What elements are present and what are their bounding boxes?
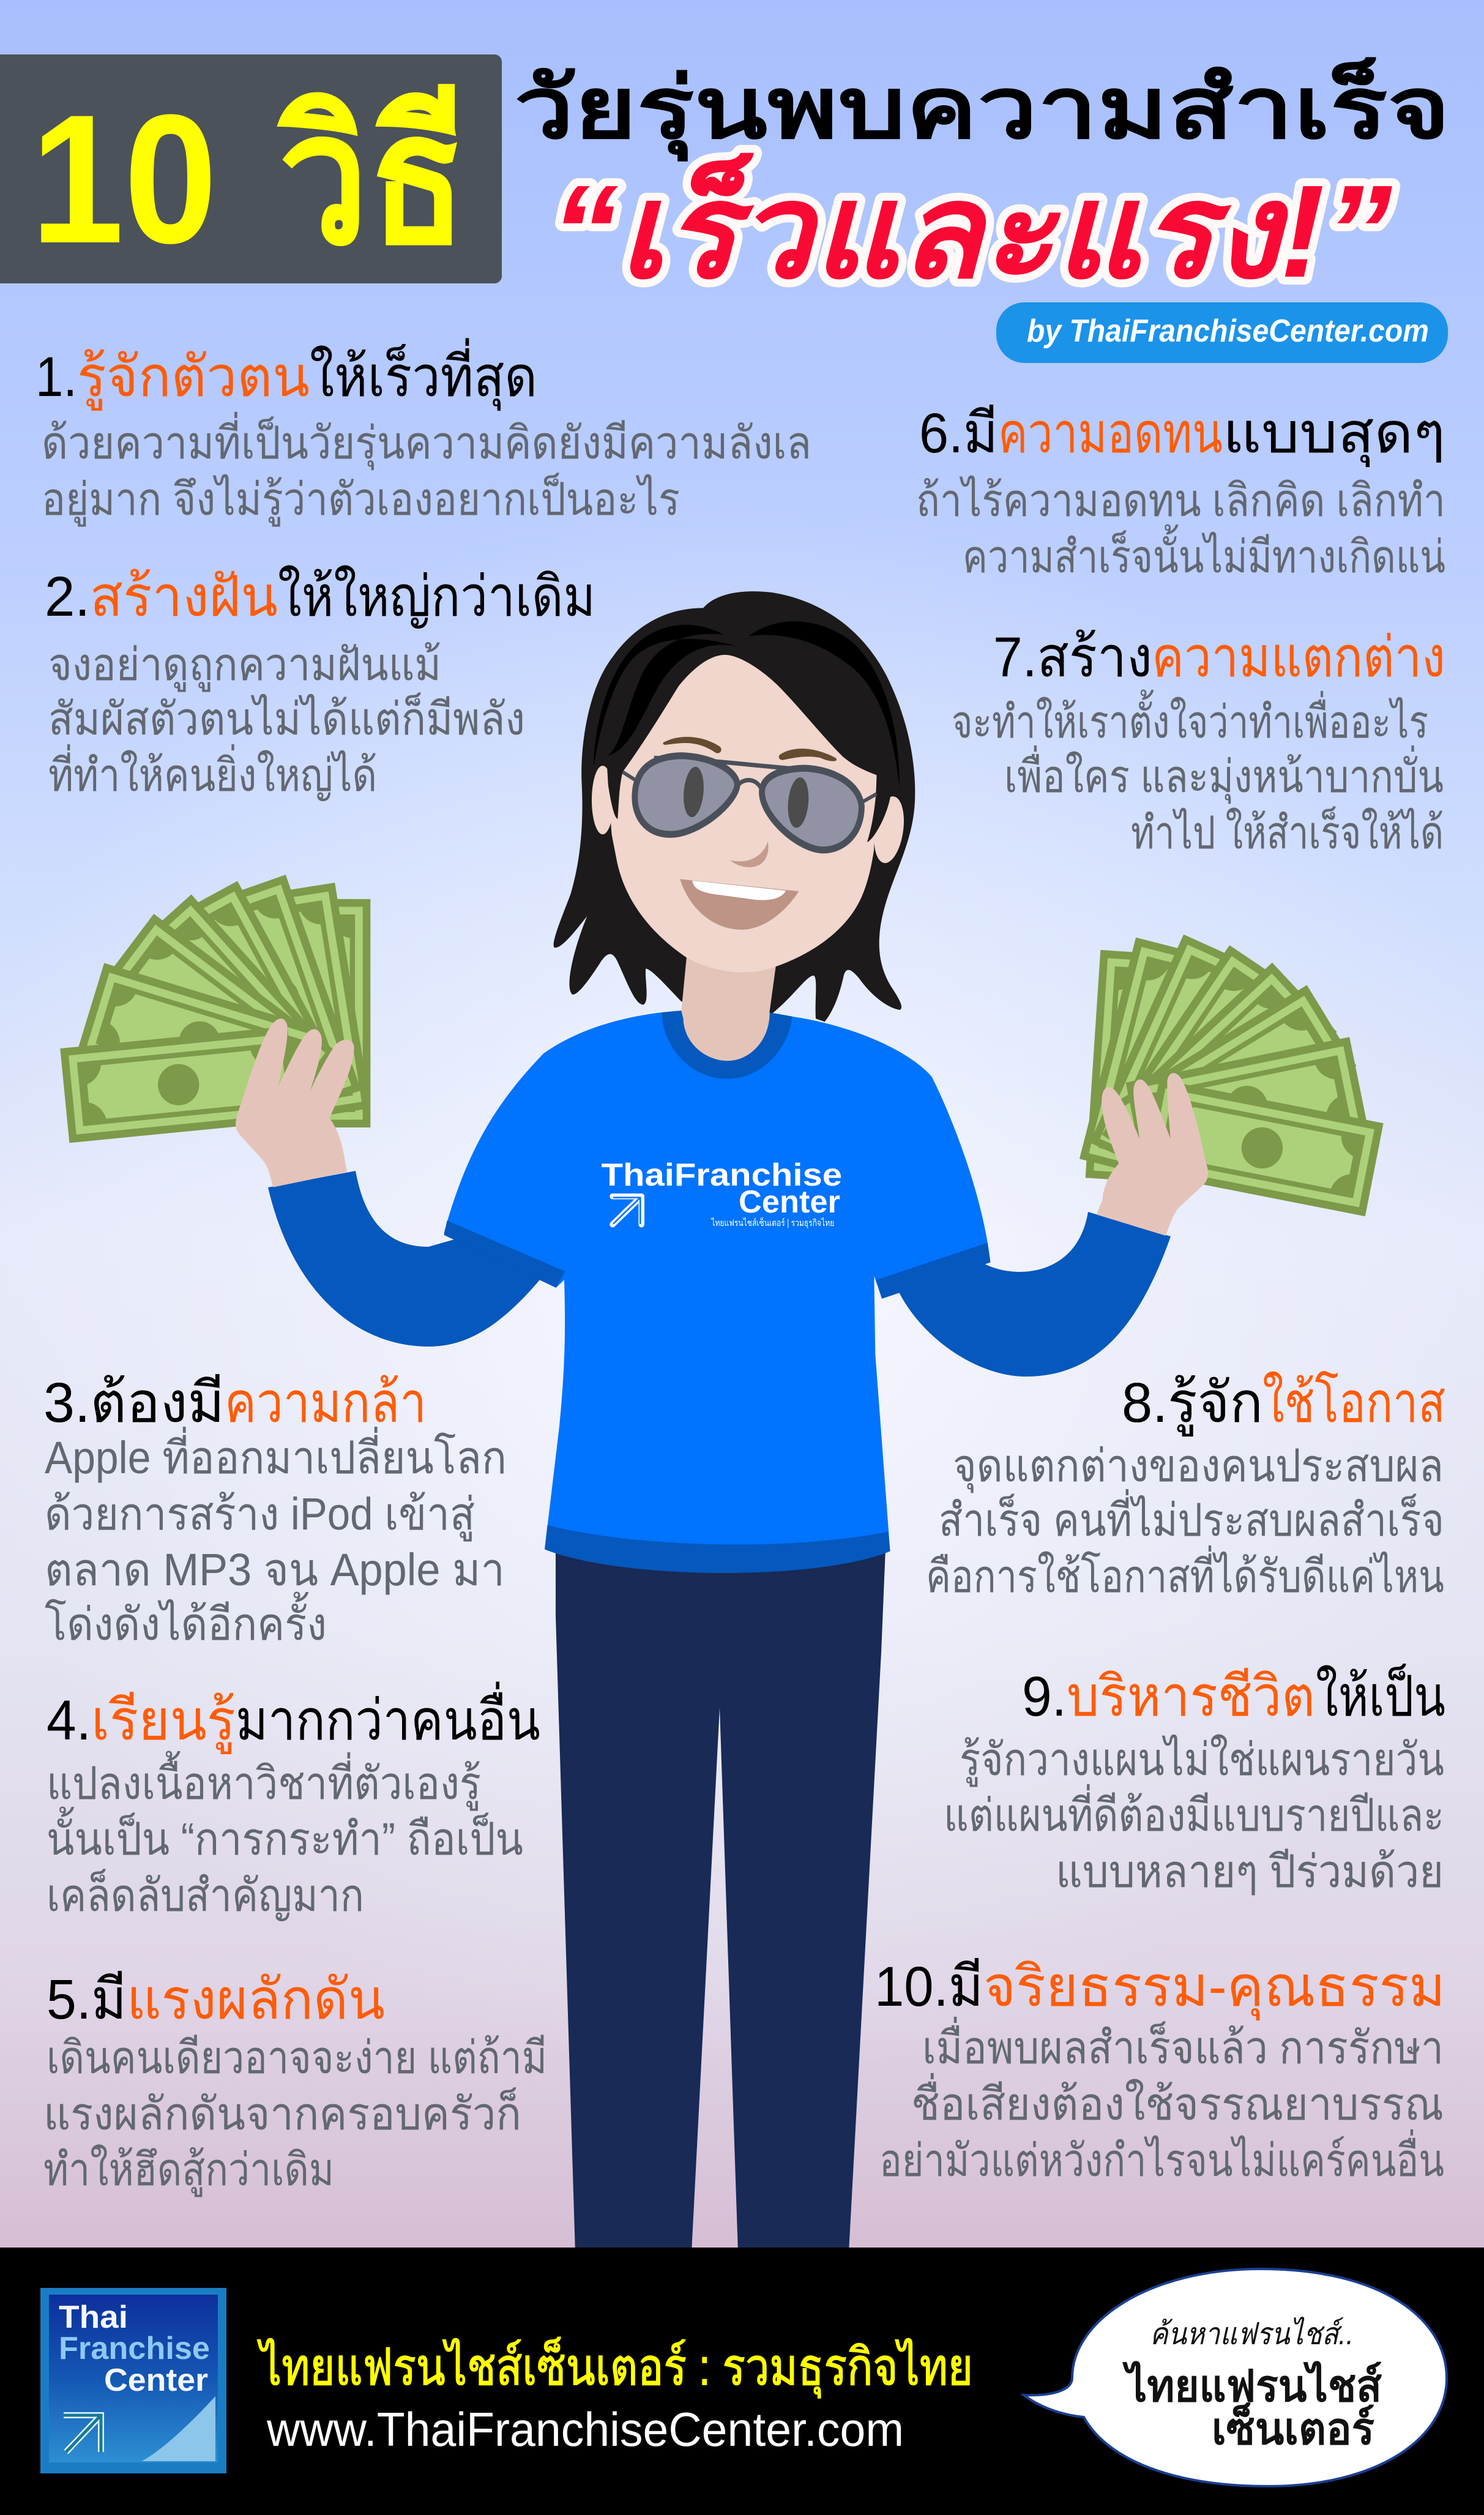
panel: title badge 10 วิธี (0, 54, 502, 283)
head (592, 655, 908, 1061)
heading: เร็วและแรง: “เร็วและแรง!” (551, 152, 1392, 305)
heading: วัยรุ่นพบความสำเร็จ: วัยรุ่นพบความสำเร็จ (514, 56, 1450, 162)
tip 9 body: แบบหลายๆ ปีร่วมด้วย (1056, 1846, 1444, 1897)
tip 9 heading: บริหารชีวิต (1067, 1665, 1315, 1728)
hair (554, 591, 915, 1022)
tip 1 heading: รู้จักตัวตน (77, 346, 310, 411)
tip 9 heading: 9. (1022, 1665, 1067, 1728)
tip 1 heading: ให้เร็วที่สุด (310, 338, 537, 411)
tip 10 body: ชื่อเสียงต้องใช้จรรณยาบรรณ (911, 2072, 1444, 2129)
panel: title badge 10 วิธี: 10 (31, 76, 217, 282)
left sleeve arm (268, 1171, 551, 1347)
panel: title badge 10 วิธี: วิธี (276, 76, 467, 282)
illustration: money fan right (1072, 926, 1391, 1224)
tip 9 heading (1022, 1663, 1445, 1728)
shirt logo: ไทยแฟรนไชส์เซ็นเตอร์ | รวมธุรกิจไทย (710, 1217, 834, 1229)
tip 4 body: แปลงเนื้อหาวิชาที่ตัวเองรู้ (47, 1751, 481, 1811)
tip 10 body (879, 2016, 1444, 2186)
tip 8 heading (1122, 1371, 1445, 1437)
sideburns (607, 766, 625, 819)
tip 2 body: สัมผัสตัวตนไม่ได้แต่ก็มีพลัง (48, 693, 525, 744)
right sleeve arm (881, 1212, 1171, 1377)
tip 4 body: นั้นเป็น “การกระทำ” ถือเป็น (47, 1806, 523, 1864)
byline pill (996, 302, 1448, 363)
tip 1 body: ด้วยความที่เป็นวัยรุ่นความคิดยังมีความลังเล (42, 411, 811, 471)
tip 8 (926, 1371, 1445, 1602)
illustration: money fan left (53, 866, 378, 1150)
tip 2 body (48, 639, 525, 801)
tip 8 body (926, 1440, 1444, 1602)
tip 7 heading: 7.สร้าง (993, 626, 1152, 689)
tip 3 body: ด้วยการสร้าง iPod เข้าสู่ (45, 1489, 475, 1542)
tip 2 body: ที่ทำให้คนยิ่งใหญ่ได้ (48, 744, 377, 801)
speech bubble (1024, 2269, 1447, 2486)
tip 2 heading (45, 566, 595, 629)
nose (730, 841, 769, 867)
neck (681, 955, 776, 1061)
tip 4 heading: มากกว่าคนอื่น (236, 1681, 540, 1752)
illustration: character (236, 591, 1208, 2252)
footer logo: Franchise (59, 2331, 210, 2366)
tip 5 (43, 1968, 547, 2197)
tip 1 body: อยู่มาก จึงไม่รู้ว่าตัวเองอยากเป็นอะไร (42, 473, 680, 527)
footer logo (40, 2288, 226, 2473)
tip 6 heading: ความอดทน (998, 402, 1223, 465)
mouth (680, 879, 799, 930)
trousers (556, 1549, 886, 2252)
tip 9 (944, 1663, 1445, 1897)
tip 4 heading: 4. (47, 1689, 91, 1752)
eyebrows (663, 737, 721, 753)
shirt logo (602, 1157, 842, 1229)
tip 3 heading: 3.ต้องมี (43, 1372, 225, 1434)
shirt logo: Center (739, 1184, 840, 1220)
tip 10 heading: จริยธรรม-คุณธรรม (983, 1956, 1445, 2021)
tip 5 body (43, 2032, 547, 2197)
tip 10 (874, 1956, 1445, 2186)
speech bubble: ไทยแฟรนไชส์ (1122, 2360, 1382, 2411)
tip 8 heading: 8.รู้จัก (1122, 1372, 1263, 1437)
right hand (1097, 1073, 1208, 1236)
tip 7 heading: ความแตกต่าง (1152, 626, 1445, 689)
speech bubble: ค้นหาแฟรนไชส์.. (1150, 2317, 1354, 2351)
tip 7 (952, 626, 1445, 858)
tip 4 (47, 1681, 540, 1921)
tip 4 heading: เรียนรู้ (91, 1689, 236, 1754)
footer website: www.ThaiFranchiseCenter.com (266, 2402, 904, 2456)
tip 3 body: Apple ที่ออกมาเปลี่ยนโลก (45, 1426, 507, 1483)
tip 1 heading: 1. (35, 346, 77, 408)
tip 3 heading (43, 1372, 427, 1434)
tip 2 heading: ให้ใหญ่กว่าเดิม (278, 566, 595, 629)
tip 1 (35, 338, 811, 527)
face (608, 655, 877, 973)
tip 9 heading: ให้เป็น (1316, 1663, 1445, 1728)
speech bubble: เซ็นเตอร์ (1212, 2402, 1374, 2454)
tip 5 body: แรงผลักดันจากครอบครัวก็ (43, 2088, 521, 2139)
byline pill: by ThaiFranchiseCenter.com (1027, 313, 1429, 349)
tip 4 body: เคล็ดลับสำคัญมาก (47, 1869, 364, 1921)
tip 5 body: เดินคนเดียวอาจจะง่าย แต่ถ้ามี (47, 2032, 547, 2083)
tip 7 heading (993, 626, 1445, 689)
tip 7 body (952, 689, 1444, 858)
tip 3 body: ตลาด MP3 จน Apple มา (45, 1544, 505, 1595)
left hand (236, 1018, 354, 1187)
tip 5 heading: 5.มี (47, 1968, 127, 2031)
tip 2 (45, 566, 595, 801)
footer tagline: ไทยแฟรนไชส์เซ็นเตอร์ : รวมธุรกิจไทย (257, 2337, 973, 2399)
tip 6 heading (919, 402, 1445, 468)
tip 6 (916, 402, 1445, 582)
tip 2 heading: สร้างฝัน (90, 566, 278, 628)
footer logo: Center (104, 2363, 208, 2398)
tip 3 body (45, 1426, 507, 1650)
sunglasses (622, 756, 877, 850)
tip 1 body (42, 411, 811, 527)
tip 4 heading (47, 1681, 540, 1754)
tip 5 body: ทำให้ฮึดสู้กว่าเดิม (43, 2144, 334, 2197)
tip 6 heading: แบบสุดๆ (1223, 402, 1445, 468)
tip 2 heading: 2. (45, 566, 90, 628)
tip 4 body (47, 1751, 523, 1921)
tip 2 body: จงอย่าดูถูกความฝันแม้ (48, 639, 441, 692)
tip 3 (43, 1372, 507, 1650)
footer band (0, 2248, 1484, 2515)
tip 1 heading (35, 338, 537, 411)
t-shirt (444, 1011, 990, 1573)
tip 6 heading: 6.มี (919, 402, 998, 465)
tip 9 body (944, 1734, 1444, 1897)
tip 10 heading: 10.มี (874, 1956, 983, 2018)
tip 3 body: โด่งดังได้อีกครั้ง (45, 1591, 327, 1650)
tip 5 heading: แรงผลักดัน (127, 1968, 385, 2031)
tip 6 body (916, 475, 1445, 582)
ears (592, 766, 614, 834)
shirt logo: ThaiFranchise (602, 1157, 842, 1193)
tip 3 heading: ความกล้า (225, 1372, 427, 1434)
footer logo: Thai (59, 2300, 128, 2335)
